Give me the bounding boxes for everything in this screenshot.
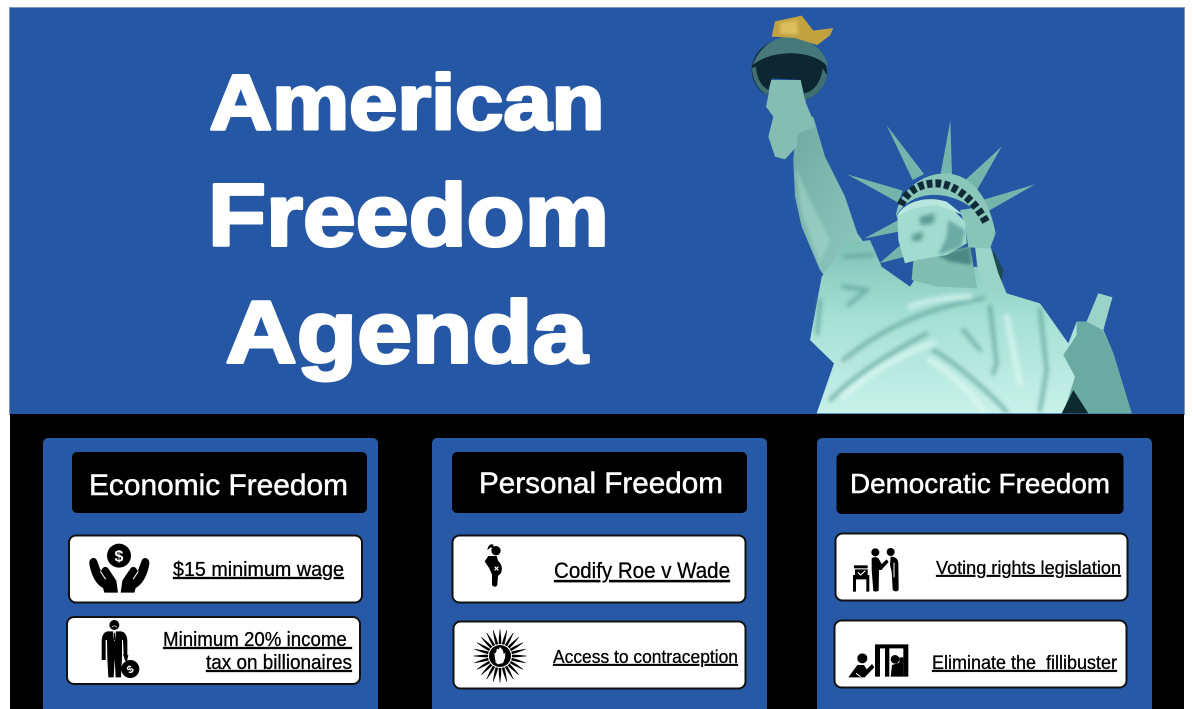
torch handle and hand [766,80,816,159]
icon: hands holding coin: $ [115,548,124,565]
heading [452,452,747,513]
image: Statue of Liberty [752,16,1132,413]
title [208,58,609,382]
header banner [10,8,1184,414]
robe [810,240,1132,413]
head and crown [896,173,1007,293]
title: American [210,58,604,146]
item: filibuster [834,620,1126,688]
item: contraception: Access to contraception [553,647,738,667]
icon: voters at ballot box [853,548,899,592]
item: billionaire tax [67,617,360,684]
icon: hand stop with sperm rays [473,629,527,683]
curls [960,207,995,248]
hair and braid [990,250,1003,282]
heading: Economic Freedom [89,469,348,502]
heading: Personal Freedom [479,467,723,500]
item: minimum wage [69,536,362,602]
black lower background [10,414,1184,709]
crown band [896,173,996,235]
face [897,201,967,263]
item: voting rights [836,534,1128,600]
icon: hands holding coin [89,544,149,593]
item: minimum wage: $15 minimum wage [173,559,344,581]
torch platform [752,38,827,99]
item: filibuster: Eliminate the fillibuster [932,653,1118,674]
title: Freedom [208,166,609,264]
panel: Economic Freedom [43,438,378,709]
icon: person at prison bars [848,644,908,677]
crown rays [847,121,1035,263]
item: contraception [454,622,746,688]
right hand and tablet [1063,293,1132,413]
item: billionaire tax: Minimum 20% income [163,629,352,651]
icon: man with money bag: $ [125,663,136,677]
icon: pregnant woman [485,544,502,587]
heading [72,452,367,513]
item: billionaire tax: tax on billionaires [206,652,352,674]
heading [836,453,1124,514]
item: voting rights: Voting rights legislation [936,558,1121,578]
panel: Personal Freedom [432,438,767,709]
icon: man with money bag [102,620,139,678]
neck [912,247,977,288]
robe folds [817,255,1047,412]
panel: Democratic Freedom [817,438,1152,709]
item: Roe v Wade [452,536,746,602]
torch flame [772,16,833,45]
heading: Democratic Freedom [850,468,1110,499]
robe highlights [843,297,1020,410]
title: Agenda [226,282,589,382]
raised arm [793,117,877,283]
item: Roe v Wade: Codify Roe v Wade [554,558,730,583]
